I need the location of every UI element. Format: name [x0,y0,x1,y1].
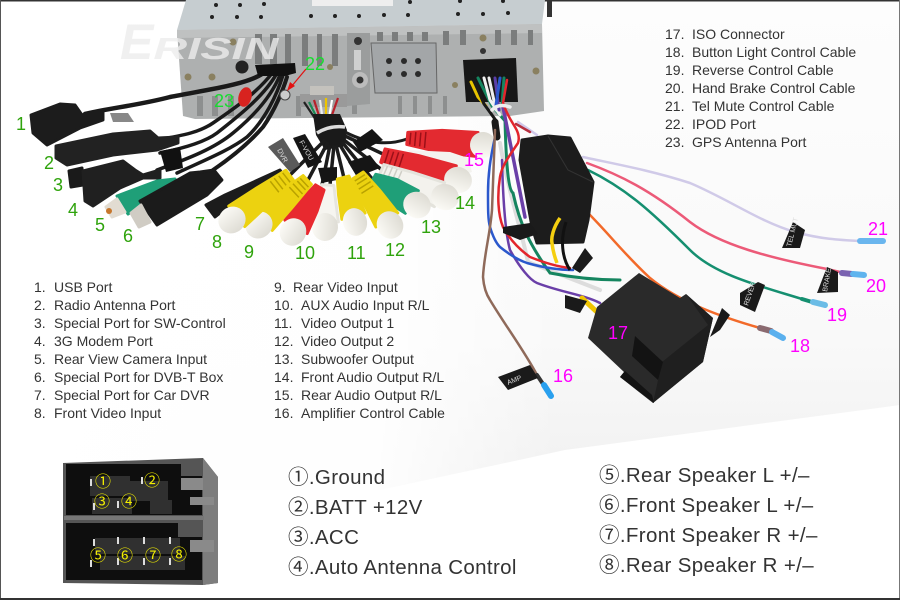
connector 3 SW control [69,168,83,187]
connector 15 red plug [379,143,475,197]
pin legend left [288,466,517,579]
legend 17-23: 19. [665,62,684,78]
legend 9-16: Rear Audio Output R/L [301,387,442,403]
legend 9-16: 10. [274,297,293,313]
wire tags: AMP [506,375,523,387]
legend 17-23: 23. [665,134,684,150]
pin number markers: ③ [94,493,110,511]
legend 9-16: 16. [274,405,293,421]
wire tags: REVER [743,282,757,307]
pin number markers [90,472,187,565]
car stereo unit rear [177,0,552,119]
legend 1-8: Rear View Camera Input [54,351,207,367]
legend 17-23: Button Light Control Cable [692,44,856,60]
ISO harness wires [471,78,860,375]
legend 9-16: Subwoofer Output [301,351,414,367]
connector 6 DVB-T [131,170,222,227]
legend 9-16: 15. [274,387,293,403]
wire 20 pink [587,163,840,272]
pin legend left: ③.ACC [288,526,359,549]
center harness [290,86,407,185]
pinout connector photo [63,458,218,585]
connector 2 radio antenna [56,131,178,165]
legend 9-16: 11. [274,315,292,331]
legend 17-23: ISO Connector [692,26,785,42]
callouts: green numbers 1-14: 4 [68,200,78,220]
legend 9-16: 14. [274,369,293,385]
legend 17-23: IPOD Port [692,116,756,132]
callouts: magenta numbers 15-21: 20 [866,276,886,296]
legend 1-8: Special Port for Car DVR [54,387,210,403]
callouts: magenta numbers 15-21: 16 [553,366,573,386]
wire 16 brown [483,130,537,375]
callouts: magenta numbers 15-21: 17 [608,323,628,343]
legend 1-8: 4. [34,333,46,349]
legend 9-16: Rear Video Input [293,279,398,295]
connector 14 white plug [376,158,463,214]
cable tags [110,113,383,183]
ISO socket on unit [463,58,518,102]
legend 17-23: 22. [665,116,684,132]
callouts: green numbers 1-14: 7 [195,214,205,234]
callouts: green numbers 1-14: 3 [53,175,63,195]
cable tags: F-VOU [297,140,314,162]
pin legend left: ②.BATT +12V [288,496,423,519]
white plug behind [407,150,472,176]
pin legend left: ④.Auto Antenna Control [288,556,517,579]
legend 9-16: Video Output 1 [301,315,394,331]
legend 17-23: 18. [665,44,684,60]
connector 13 green plug [366,168,436,223]
pin number markers: ⑦ [145,547,161,565]
legend 1-8: Radio Antenna Port [54,297,176,313]
callouts: green numbers 1-14: 11 [347,243,366,263]
callouts: magenta numbers 15-21: 19 [827,305,847,325]
legend 1-8 [34,279,226,421]
callouts: green numbers 1-14: 2 [44,153,54,173]
callouts: green numbers 1-14: 5 [95,215,105,235]
wire tags [498,216,838,390]
ISO connector plug [588,273,713,403]
legend 9-16 [274,279,445,421]
pin legend left: ①.Ground [288,466,385,489]
wire tags: TEL MUT [786,216,800,247]
legend 17-23: 17. [665,26,684,42]
plate with holes [371,43,437,93]
connector white plug [311,184,341,242]
legend 1-8: Special Port for SW-Control [54,315,226,331]
left cable bundle [85,72,287,173]
pin legend right: ⑥.Front Speaker L +/– [599,494,814,517]
pin number markers: ⑥ [117,547,133,565]
legend 17-23: Tel Mute Control Cable [692,98,835,114]
legend 17-23: GPS Antenna Port [692,134,807,150]
pin number markers: ④ [121,493,137,511]
connector 10 red plug [275,181,331,251]
callouts: green numbers 1-14: 22 [305,54,325,74]
legend 9-16: Front Audio Output R/L [301,369,444,385]
legend 9-16: Video Output 2 [301,333,394,349]
legend 1-8: USB Port [54,279,112,295]
legend 17-23: 21. [665,98,684,114]
pin legend right: ⑧.Rear Speaker R +/– [599,554,814,577]
callouts: green numbers 1-14: 9 [244,242,254,262]
callouts: green numbers 1-14: 6 [123,226,133,246]
wire tags: BRAKE [822,267,833,292]
legend 1-8: 3G Modem Port [54,333,153,349]
legend 9-16: AUX Audio Input R/L [301,297,430,313]
pin legend right [599,464,818,577]
connector 8 yellow plug [213,165,298,239]
legend 17-23 [665,26,856,150]
connector 12 yellow plug [347,168,408,244]
connector 1 USB [31,104,103,145]
wire tips [537,241,883,396]
connector 4 3G modem [83,161,160,206]
callouts: green numbers 1-14: 10 [295,243,315,263]
legend 9-16: 13. [274,351,293,367]
cable tags: DVR [275,148,288,164]
legend 1-8: 3. [34,315,46,331]
yellow wire into ISO connector [582,298,598,313]
wire 19 green [588,170,802,299]
legend 17-23: Hand Brake Control Cable [692,80,856,96]
callouts: green numbers 1-14: 1 [16,114,26,134]
callouts: magenta numbers 15-21: 18 [790,336,810,356]
legend 9-16: Amplifier Control Cable [301,405,445,421]
ISO relay box [520,136,593,270]
legend 1-8: 5. [34,351,46,367]
pin number markers: ⑧ [171,546,187,564]
callouts: green numbers 1-14: 23 [214,91,234,111]
connector 11 yellow plug [332,174,370,239]
pin number markers: ② [144,472,160,490]
legend 1-8: 2. [34,297,46,313]
callouts: green numbers 1-14: 14 [455,193,475,213]
legend 17-23: 20. [665,80,684,96]
GPS red plug and iPod port [236,86,290,108]
legend 1-8: 8. [34,405,46,421]
wire 18 orange [588,213,760,328]
watermark: ERISIN [120,14,279,70]
legend 17-23: Reverse Control Cable [692,62,834,78]
connector 5 camera RCA [106,179,175,217]
connector 7 car DVR [206,170,284,217]
connector 9 yellow plug [240,170,316,244]
legend 1-8: 6. [34,369,46,385]
arrow to port 22 [287,69,306,91]
legend 1-8: Front Video Input [54,405,161,421]
callouts: green numbers 1-14 [16,54,475,263]
pin number markers: ⑤ [90,547,106,565]
pin number markers: ① [95,473,111,491]
callouts: magenta numbers 15-21: 15 [464,150,484,170]
wire 21 lavender [583,157,860,241]
legend 9-16: 9. [274,279,286,295]
pin legend right: ⑦.Front Speaker R +/– [599,524,818,547]
legend 9-16: 12. [274,333,293,349]
callouts: magenta numbers 15-21: 21 [868,219,888,239]
callouts: magenta numbers 15-21 [464,150,888,386]
legend 1-8: 1. [34,279,46,295]
connector plug red top [406,125,497,159]
legend 1-8: Special Port for DVB-T Box [54,369,223,385]
callouts: green numbers 1-14: 8 [212,232,222,252]
legend 1-8: 7. [34,387,46,403]
callouts: green numbers 1-14: 13 [421,217,441,237]
callouts: green numbers 1-14: 12 [385,240,405,260]
pin legend right: ⑤.Rear Speaker L +/– [599,464,810,487]
